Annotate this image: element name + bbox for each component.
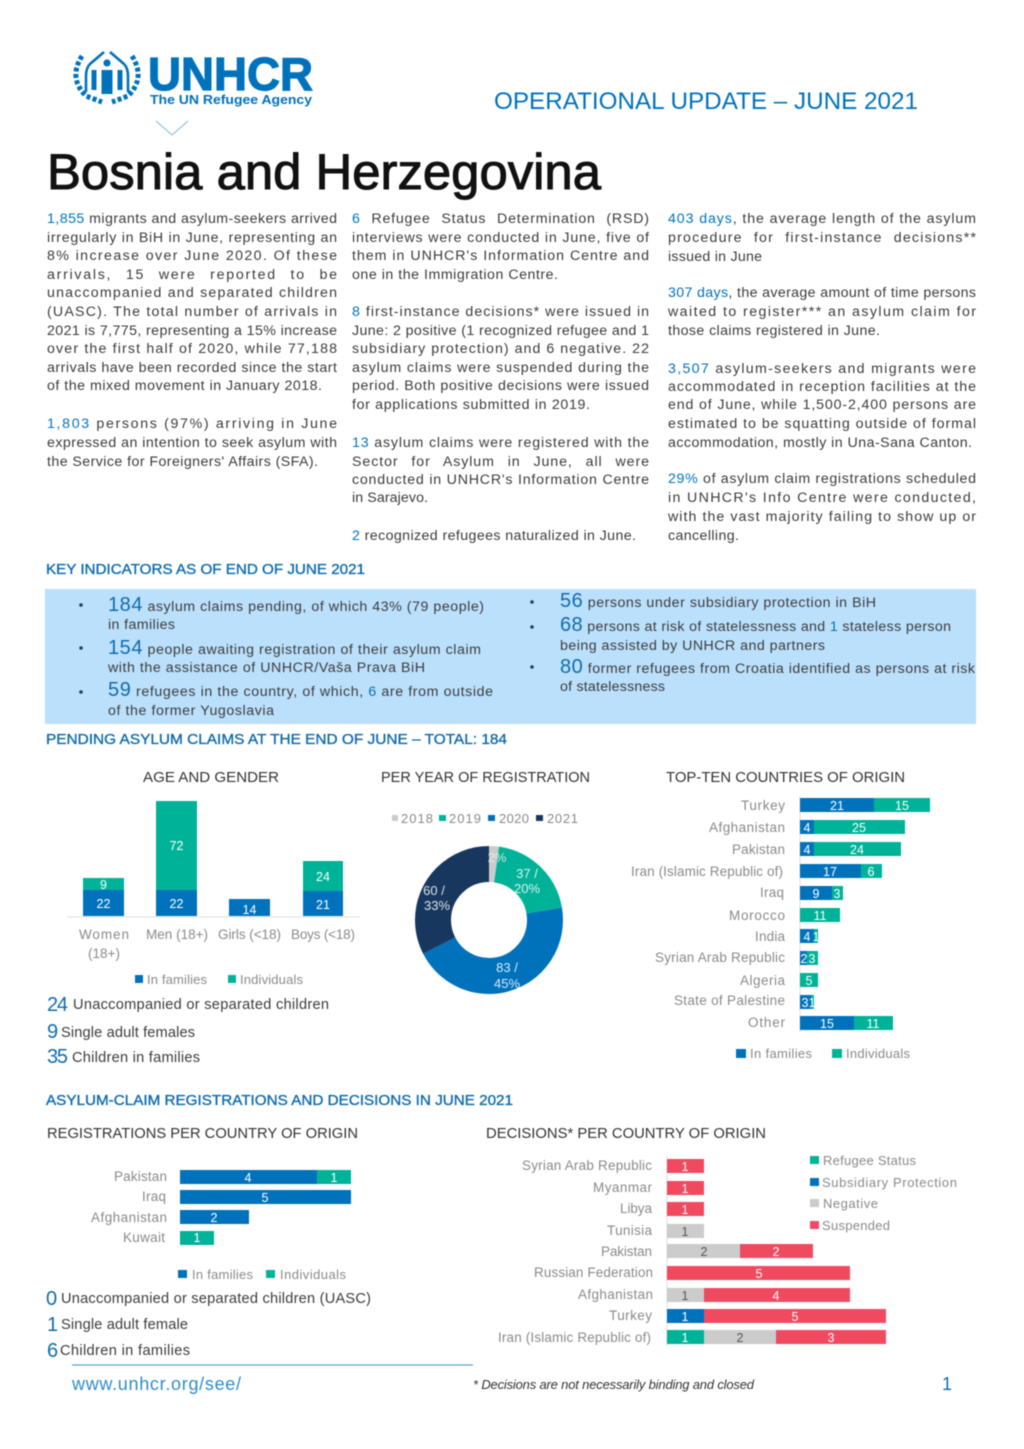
legend: In families: [750, 1046, 812, 1061]
indicator: 154 awaiting registration: 154 people awaiting registration of their asylum claim: [108, 637, 481, 659]
text column 2: asylum claims were suspended during the: [352, 360, 649, 376]
bar chart: decisions per country: 1: [682, 1203, 689, 1217]
panel: key indicators: [45, 589, 976, 724]
stats: registrations: 6: [47, 1340, 58, 1362]
bar chart: registrations per country: 1: [194, 1231, 201, 1245]
bar chart: decisions per country: Iran (Islamic Republic of): [498, 1330, 651, 1345]
donut chart: per year of registration: 83 /: [496, 960, 518, 975]
stats: pending claims: 9: [47, 1021, 58, 1043]
donut chart: per year of registration: 20%: [514, 881, 540, 896]
bar chart: decisions per country: 4: [773, 1289, 780, 1303]
bar chart: age and gender: 22: [170, 897, 183, 911]
text column 1: arrivals, 15 were reported to be: [47, 267, 337, 283]
indicator: 80 former refugees: 80 former refugees from Croatia identified as persons at risk: [560, 656, 976, 678]
text column 2: subsidiary protection) and 6 negative. 22: [352, 341, 649, 357]
text column 1: 8% increase over June 2020. Of these: [47, 248, 337, 264]
wordmark: UNHCR: [148, 48, 313, 100]
text column 2: 6 Refugee Status Determination (RSD): [352, 211, 649, 227]
text column 2: interviews were conducted in June, five of: [352, 230, 649, 246]
stats: pending claims: [47, 994, 329, 1068]
legend: Suspended: [822, 1218, 890, 1233]
bar chart: age and gender: [67, 801, 360, 987]
bar chart: top-ten countries of origin: 3: [834, 887, 841, 901]
legend: In families: [147, 972, 208, 987]
bar chart: top-ten countries of origin: 1: [813, 930, 820, 944]
bar chart: top-ten countries of origin: 25: [852, 821, 866, 835]
bar chart: top-ten countries of origin: 5: [806, 974, 813, 988]
stats: pending claims: Single adult females: [61, 1025, 195, 1041]
indicator: 80 former refugees: [560, 656, 976, 695]
bar chart: decisions per country: Tunisia: [607, 1223, 652, 1238]
donut chart: per year of registration: 60 /: [423, 883, 445, 898]
legend: 2019: [449, 811, 481, 826]
subheading: top-ten countries: TOP-TEN COUNTRIES OF ORIGIN: [666, 770, 905, 786]
text column 3: in UNHCR's Info Centre were conducted,: [668, 490, 976, 506]
text column 1: (UASC). The total number of arrivals in: [47, 304, 337, 320]
legend: Negative: [823, 1196, 878, 1211]
legend: [392, 811, 578, 826]
bar chart: registrations per country: 2: [211, 1211, 218, 1225]
stats: registrations: Single adult female: [61, 1317, 188, 1333]
bar chart: top-ten countries of origin: 3: [809, 952, 816, 966]
text column 2: conducted in UNHCR's Information Centre: [352, 472, 649, 488]
bar chart: decisions per country: Afghanistan: [578, 1287, 653, 1302]
indicator: 68 at risk of statelessness: being assisted by UNHCR and partners: [560, 638, 825, 654]
bar chart: decisions per country: 1: [682, 1182, 689, 1196]
bar chart: registrations per country: 1: [331, 1171, 338, 1185]
bar chart: registrations per country: [91, 1169, 351, 1282]
text column 3: waited to register*** an asylum claim for: [667, 304, 976, 320]
text column 2: [352, 211, 649, 544]
text column 3: cancelling.: [668, 528, 739, 544]
bar chart: top-ten countries of origin: 9: [813, 887, 820, 901]
bar chart: top-ten countries of origin: 17: [823, 865, 837, 879]
legend: [135, 972, 304, 987]
text column 2: 2 recognized refugees naturalized in June.: [352, 528, 636, 544]
indicator: 68 at risk of statelessness: 68 persons at risk of statelessness and 1 stateless person: [560, 614, 951, 636]
legend: In families: [192, 1267, 254, 1282]
subheading: registrations: REGISTRATIONS PER COUNTRY OF ORIGIN: [47, 1126, 358, 1142]
heading: registrations and decisions: ASYLUM-CLAIM REGISTRATIONS AND DECISIONS IN JUNE 2021: [46, 1093, 513, 1109]
indicator: 80 former refugees: of statelessness: [560, 679, 665, 695]
bar chart: decisions per country: 1: [682, 1310, 689, 1324]
bar chart: registrations per country: 5: [262, 1191, 269, 1205]
text column 3: accommodated in reception facilities at the: [668, 379, 976, 395]
bar chart: decisions per country: Myanmar: [593, 1180, 652, 1195]
indicator: 184 pending claims: 184 asylum claims pending, of which 43% (79 people): [108, 594, 484, 616]
bar chart: decisions per country: 3: [828, 1331, 835, 1345]
heading: pending claims: PENDING ASYLUM CLAIMS AT THE END OF JUNE – TOTAL: 184: [46, 732, 507, 748]
bar chart: age and gender: 14: [243, 903, 256, 917]
bar chart: decisions per country: Russian Federation: [534, 1265, 653, 1280]
bar chart: top-ten countries of origin: 15: [820, 1017, 834, 1031]
text column 3: procedure for first-instance decisions**: [668, 230, 976, 246]
legend: Refugee Status: [823, 1153, 916, 1168]
text column 1: expressed an intention to seek asylum with: [47, 435, 337, 451]
bar chart: decisions per country: Pakistan: [601, 1244, 652, 1259]
legend: 2021: [547, 811, 578, 826]
legend: Subsidiary Protection: [822, 1175, 957, 1190]
bar chart: registrations per country: 4: [245, 1171, 252, 1185]
bar chart: top-ten countries of origin: 21: [830, 799, 844, 813]
bar chart: age and gender: 9: [100, 878, 107, 892]
text column 1: 2021 is 7,775, representing a 15% increase: [47, 323, 337, 339]
tagline: The UN Refugee Agency: [150, 92, 313, 107]
indicator: 59 refugees: [108, 679, 493, 719]
text column 2: one in the Immigration Centre.: [352, 267, 558, 283]
bar chart: age and gender: Men (18+): [146, 927, 208, 942]
text column 3: [667, 211, 976, 544]
text column 3: with the vast majority failing to show up or: [667, 509, 976, 525]
bar chart: top-ten countries of origin: 1: [809, 996, 816, 1010]
bar chart: top-ten countries of origin: Morocco: [729, 908, 785, 923]
text column 3: 3,507 asylum-seekers and migrants were: [668, 361, 976, 377]
text column 3: 29% of asylum claim registrations scheduled: [668, 471, 976, 487]
bar chart: decisions per country: 2: [773, 1245, 780, 1259]
bar chart: top-ten countries of origin: 6: [868, 865, 875, 879]
bar chart: decisions per country: 1: [682, 1160, 689, 1174]
text column 1: irregularly in BiH in June, representing an: [47, 230, 337, 246]
bar chart: top-ten countries of origin: State of Palestine: [674, 993, 785, 1008]
text column 1: unaccompanied and separated children: [47, 285, 337, 301]
bar chart: top-ten countries of origin: Syrian Arab Republic: [655, 950, 785, 965]
subheading: per year of registration: PER YEAR OF REGISTRATION: [381, 770, 590, 786]
legend: 2020: [499, 811, 529, 826]
text column 3: those claims registered in June.: [668, 323, 880, 339]
bar chart: age and gender: (18+): [88, 946, 120, 961]
stats: registrations: Unaccompanied or separated children (UASC): [61, 1291, 371, 1307]
bar chart: top-ten countries of origin: Other: [748, 1015, 786, 1030]
text column 1: of the mixed movement in January 2018.: [47, 378, 322, 394]
footer link: www.unhcr.org/see/: [71, 1374, 241, 1394]
stats: registrations: [46, 1288, 371, 1362]
legend: [736, 1046, 910, 1061]
text column 2: for applications submitted in 2019.: [352, 397, 590, 413]
bar chart: top-ten countries of origin: 3: [802, 996, 809, 1010]
bar chart: decisions per country: 1: [682, 1289, 689, 1303]
bar chart: top-ten countries of origin: 24: [850, 843, 864, 857]
bar chart: top-ten countries of origin: 15: [895, 799, 909, 813]
legend: Individuals: [280, 1267, 346, 1282]
text column 2: 13 asylum claims were registered with the: [352, 435, 649, 451]
text column 2: Sector for Asylum in June, all were: [352, 454, 649, 470]
logo: UNHCR: [76, 48, 313, 107]
text column 1: 1,803 persons (97%) arriving in June: [47, 416, 337, 432]
indicator: 56 subsidiary protection: 56 persons under subsidiary protection in BiH: [560, 590, 876, 612]
text column 3: 307 days, the average amount of time persons: [668, 285, 976, 301]
bar chart: age and gender: 21: [316, 898, 330, 912]
bar chart: decisions per country: 2: [737, 1331, 744, 1345]
donut chart: per year of registration: 2%: [488, 850, 507, 865]
bar chart: decisions per country: Turkey: [609, 1308, 652, 1323]
bar chart: decisions per country: [498, 1153, 957, 1346]
text column 3: 403 days, the average length of the asylum: [668, 211, 976, 227]
legend: [178, 1267, 346, 1282]
bar chart: registrations per country: Iraq: [142, 1189, 166, 1204]
bar chart: decisions per country: 2: [701, 1245, 708, 1259]
bar chart: top-ten countries of origin: 11: [814, 909, 827, 923]
bar chart: age and gender: Women: [79, 927, 129, 942]
report label: OPERATIONAL UPDATE – JUNE 2021: [494, 88, 918, 115]
footnote: * Decisions are not necessarily binding and closed: [473, 1377, 755, 1392]
bar chart: top-ten countries of origin: Algeria: [740, 973, 785, 988]
text column 2: period. Both positive decisions were issued: [352, 378, 649, 394]
stats: registrations: 0: [46, 1288, 57, 1310]
indicator: 68 at risk of statelessness: [560, 614, 951, 654]
legend: [810, 1153, 957, 1233]
bar chart: decisions per country: 5: [756, 1267, 763, 1281]
bar chart: top-ten countries of origin: Iraq: [760, 885, 784, 900]
bar chart: top-ten countries of origin: Iran (Islamic Republic of): [631, 864, 783, 879]
bar chart: top-ten countries of origin: India: [755, 929, 785, 944]
donut chart: per year of registration: 33%: [424, 898, 450, 913]
bar chart: decisions per country: 1: [682, 1331, 689, 1345]
indicator: 154 awaiting registration: [107, 637, 481, 676]
indicator: 59 refugees: of the former Yugoslavia: [108, 703, 274, 719]
bar chart: registrations per country: Afghanistan: [91, 1210, 167, 1225]
text column 1: over the first half of 2020, while 77,188: [47, 341, 337, 357]
text column 2: June: 2 positive (1 recognized refugee and 1: [352, 323, 649, 339]
bar chart: age and gender: Boys (<18): [291, 927, 355, 942]
subheading: decisions: DECISIONS* PER COUNTRY OF ORIGIN: [486, 1126, 766, 1142]
stats: registrations: 1: [47, 1314, 58, 1336]
bar chart: decisions per country: 1: [682, 1225, 689, 1239]
bar chart: top-ten countries of origin: Afghanistan: [709, 820, 785, 835]
bar chart: top-ten countries of origin: 4: [804, 843, 811, 857]
stats: registrations: Children in families: [60, 1343, 190, 1359]
donut chart: per year of registration: 37 /: [516, 866, 538, 881]
stats: pending claims: Unaccompanied or separated children: [73, 997, 329, 1013]
bar chart: top-ten countries of origin: Turkey: [741, 798, 785, 813]
bar chart: top-ten countries of origin: 11: [867, 1017, 880, 1031]
indicator: 184 pending claims: in families: [108, 617, 175, 633]
indicator: 154 awaiting registration: with the assistance of UNHCR/Vaša Prava BiH: [107, 660, 425, 676]
bar chart: decisions per country: Syrian Arab Republic: [522, 1158, 652, 1173]
bar chart: age and gender: 72: [170, 839, 183, 853]
text column 3: accommodation, mostly in Una-Sana Canton.: [668, 435, 972, 451]
subheading: age and gender: AGE AND GENDER: [143, 770, 279, 786]
bullets: [79, 600, 534, 694]
bar chart: top-ten countries of origin: [631, 796, 930, 1061]
bar chart: top-ten countries of origin: Pakistan: [732, 842, 785, 857]
bar chart: age and gender: 24: [316, 870, 330, 884]
stats: pending claims: Children in families: [72, 1050, 200, 1066]
text column 2: 8 first-instance decisions* were issued in: [352, 304, 649, 320]
footer: [71, 1365, 952, 1394]
legend: Individuals: [240, 972, 304, 987]
bar chart: top-ten countries of origin: 2: [801, 952, 808, 966]
bar chart: top-ten countries of origin: 4: [804, 821, 811, 835]
text column 1: the Service for Foreigners' Affairs (SFA).: [47, 454, 318, 470]
bar chart: age and gender: 22: [97, 897, 110, 911]
text column 3: issued in June: [668, 249, 762, 265]
icon: UNHCR emblem: [76, 52, 138, 102]
bar chart: registrations per country: Kuwait: [123, 1230, 165, 1245]
legend: 2018: [401, 811, 433, 826]
bar chart: decisions per country: Libya: [620, 1201, 652, 1216]
text column 1: 1,855 migrants and asylum-seekers arrived: [47, 211, 337, 227]
donut chart: per year of registration: 45%: [494, 976, 520, 991]
text column 3: estimated to be squatting outside of formal: [668, 416, 976, 432]
stats: pending claims: 35: [47, 1046, 68, 1068]
text column 2: them in UNHCR's Information Centre and: [352, 248, 649, 264]
indicator: 184 pending claims: [108, 594, 484, 633]
page number: 1: [942, 1374, 952, 1394]
text column 1: [47, 211, 337, 470]
bar chart: age and gender: Girls (<18): [218, 927, 281, 942]
text column 3: end of June, while 1,500-2,400 persons are: [668, 397, 976, 413]
text column 2: in Sarajevo.: [352, 490, 428, 506]
indicator: 59 refugees: 59 refugees in the country, of which, 6 are from outside: [108, 679, 493, 701]
stats: pending claims: 24: [47, 994, 68, 1016]
donut chart: per year of registration: [392, 811, 578, 991]
title: Bosnia and Herzegovina: [47, 144, 601, 200]
legend: Individuals: [846, 1046, 910, 1061]
heading: key indicators: KEY INDICATORS AS OF END OF JUNE 2021: [46, 562, 365, 578]
bar chart: top-ten countries of origin: 4: [804, 930, 811, 944]
bar chart: registrations per country: Pakistan: [114, 1169, 167, 1184]
icon: chevron: [156, 121, 188, 135]
text column 1: arrivals have been recorded since the start: [47, 360, 337, 376]
bar chart: decisions per country: 5: [792, 1310, 799, 1324]
